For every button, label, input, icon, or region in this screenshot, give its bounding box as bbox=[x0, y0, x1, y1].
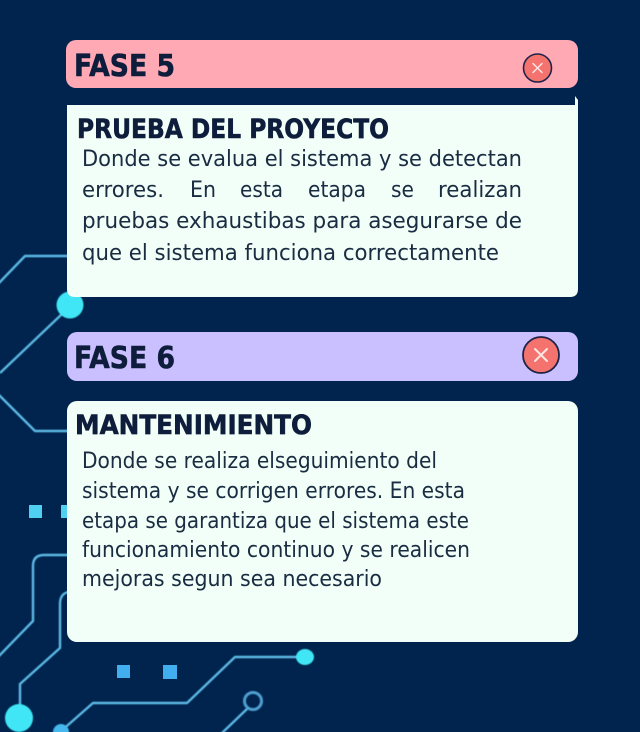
header bar: fase 6 bbox=[67, 332, 578, 381]
text block: fase 5 description: que el sistema funciona correctamente bbox=[82, 241, 499, 266]
circuit squares bbox=[29, 505, 177, 679]
text block: fase 5 description bbox=[82, 147, 522, 266]
text block: fase 5 description: errores. bbox=[82, 178, 164, 203]
text block: fase 6 description bbox=[82, 449, 470, 592]
text block: fase 5 description: esta bbox=[240, 178, 283, 203]
circuit nodes bbox=[5, 292, 314, 732]
heading: fase 6: FASE 6 bbox=[74, 341, 175, 376]
close icon: fase 6 bbox=[523, 337, 559, 373]
panel: mantenimiento bbox=[67, 401, 578, 642]
text block: fase 5 description: pruebas exhaustibas para asegurarse de bbox=[82, 209, 522, 234]
text block: fase 5 description: se bbox=[391, 178, 414, 203]
text block: fase 6 description: sistema y se corrigen errores. En esta bbox=[82, 479, 465, 504]
heading: prueba del proyecto: PRUEBA DEL PROYECTO bbox=[77, 114, 389, 145]
close icon: fase 5 bbox=[524, 54, 552, 82]
text block: fase 6 description: Donde se realiza elseguimiento del bbox=[82, 449, 437, 474]
text block: fase 5 description: etapa bbox=[308, 178, 366, 203]
text block: fase 6 description: mejoras segun sea necesario bbox=[82, 567, 382, 592]
header bar: fase 5 bbox=[66, 40, 578, 88]
heading: fase 5: FASE 5 bbox=[74, 49, 175, 84]
text block: fase 5 description: realizan bbox=[438, 178, 522, 203]
heading: mantenimiento: MANTENIMIENTO bbox=[75, 410, 312, 441]
text block: fase 6 description: etapa se garantiza que el sistema este bbox=[82, 509, 469, 534]
text block: fase 6 description: funcionamiento continuo y se realicen bbox=[82, 538, 470, 563]
text block: fase 5 description: En bbox=[190, 178, 216, 203]
panel: prueba del proyecto bbox=[67, 96, 578, 297]
circuit decoration bbox=[0, 256, 300, 732]
text block: fase 5 description: Donde se evalua el sistema y se detectan bbox=[82, 147, 522, 172]
